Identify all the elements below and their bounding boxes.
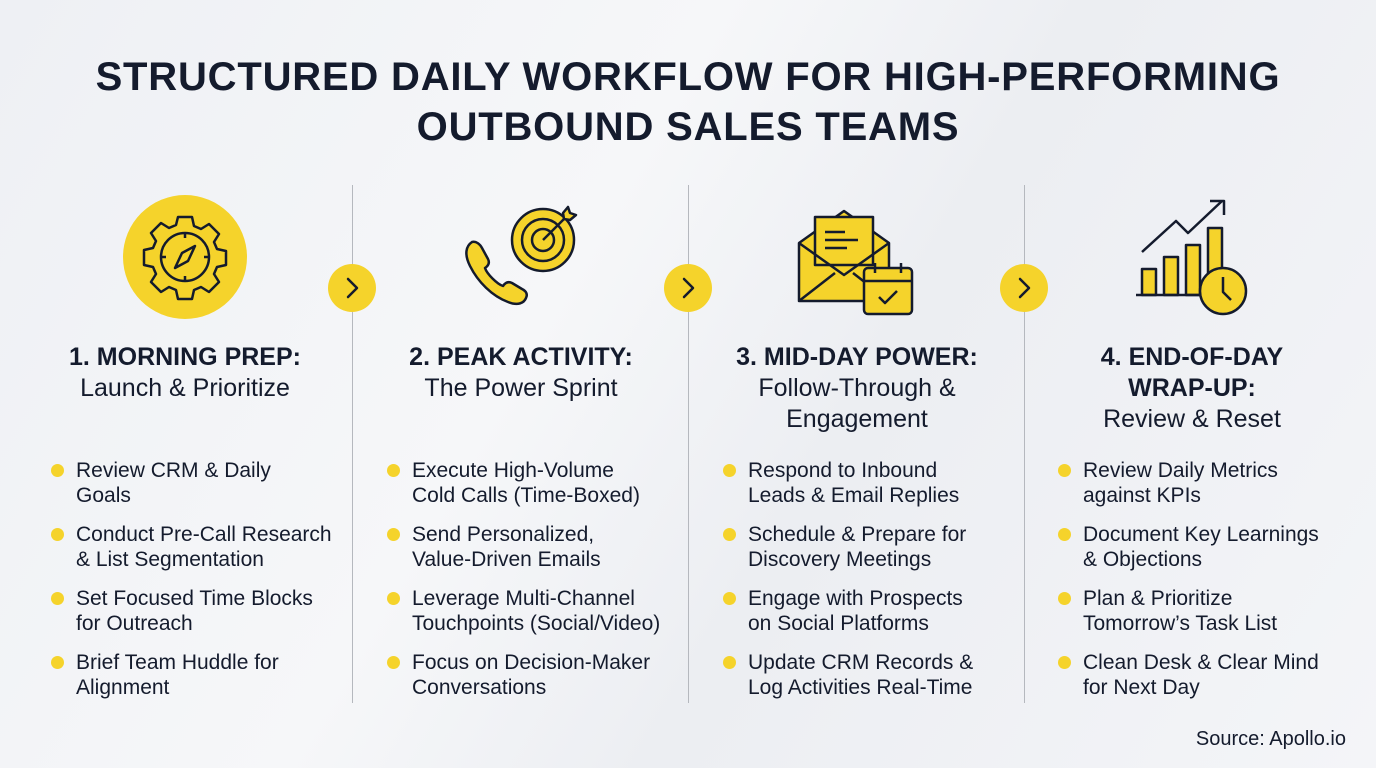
bullets 1 <box>51 459 332 699</box>
heading 1: 1. MORNING PREP: <box>69 343 301 371</box>
bullets 3: Schedule & Prepare for <box>748 523 966 546</box>
heading 2: The Power Sprint <box>424 374 618 402</box>
bullets 4: Tomorrow’s Task List <box>1083 612 1277 635</box>
bullets 2: Value-Driven Emails <box>412 548 601 571</box>
bullets 4: Document Key Learnings <box>1083 523 1319 546</box>
bullets 1: Goals <box>76 484 131 507</box>
heading 1 <box>69 343 301 402</box>
bullets 1: Alignment <box>76 676 169 699</box>
column 3 <box>723 343 978 699</box>
column 1 <box>51 343 332 699</box>
heading 4 <box>1101 343 1283 433</box>
bullets 3: Leads & Email Replies <box>748 484 959 507</box>
bullets 2 <box>387 459 660 699</box>
bullets 2: Touchpoints (Social/Video) <box>412 612 660 635</box>
bullets 4: Clean Desk & Clear Mind <box>1083 651 1319 674</box>
bullets 3: Log Activities Real-Time <box>748 676 972 699</box>
bullets 1: Set Focused Time Blocks <box>76 587 313 610</box>
heading 2 <box>409 343 633 402</box>
bullets 4: Review Daily Metrics <box>1083 459 1278 482</box>
heading 3: Follow-Through & <box>758 374 956 402</box>
column 4 <box>1058 343 1319 699</box>
heading 2: 2. PEAK ACTIVITY: <box>409 343 633 371</box>
title: STRUCTURED DAILY WORKFLOW FOR HIGH-PERFORMING <box>96 55 1280 99</box>
heading 4: WRAP-UP: <box>1128 374 1256 402</box>
title: OUTBOUND SALES TEAMS <box>417 105 959 149</box>
bullets 4 <box>1058 459 1319 699</box>
bullets 1: Brief Team Huddle for <box>76 651 279 674</box>
bullets 2: Conversations <box>412 676 546 699</box>
bullets 2: Cold Calls (Time-Boxed) <box>412 484 640 507</box>
bullets 4: for Next Day <box>1083 676 1200 699</box>
heading 4: 4. END-OF-DAY <box>1101 343 1283 371</box>
heading 1: Launch & Prioritize <box>80 374 290 402</box>
bullets 2: Leverage Multi-Channel <box>412 587 635 610</box>
bullets 3: Respond to Inbound <box>748 459 937 482</box>
title <box>96 55 1280 149</box>
column 2 <box>387 343 660 699</box>
icon: gear compass <box>123 195 247 319</box>
bullets 1: for Outreach <box>76 612 193 635</box>
source: Source: Apollo.io <box>1196 728 1346 750</box>
arrow 2 <box>664 264 712 312</box>
heading 3 <box>736 343 978 433</box>
icon: chart clock <box>1136 200 1248 316</box>
heading 3: Engagement <box>786 405 928 433</box>
heading 4: Review & Reset <box>1103 405 1281 433</box>
arrow 1 <box>328 264 376 312</box>
bullets 4: & Objections <box>1083 548 1202 571</box>
bullets 1: Review CRM & Daily <box>76 459 271 482</box>
bullets 1: & List Segmentation <box>76 548 264 571</box>
bullets 4: against KPIs <box>1083 484 1201 507</box>
bullets 3 <box>723 459 973 699</box>
bullets 3: Update CRM Records & <box>748 651 973 674</box>
icon: envelope calendar <box>798 210 914 316</box>
bullets 3: Discovery Meetings <box>748 548 931 571</box>
bullets 4: Plan & Prioritize <box>1083 587 1232 610</box>
bullets 3: on Social Platforms <box>748 612 929 635</box>
heading 3: 3. MID-DAY POWER: <box>736 343 978 371</box>
bullets 2: Send Personalized, <box>412 523 594 546</box>
bullets 3: Engage with Prospects <box>748 587 963 610</box>
bullets 2: Execute High-Volume <box>412 459 614 482</box>
bullets 1: Conduct Pre-Call Research <box>76 523 332 546</box>
arrow 3 <box>1000 264 1048 312</box>
bullets 2: Focus on Decision-Maker <box>412 651 650 674</box>
icon: phone target <box>465 206 578 306</box>
